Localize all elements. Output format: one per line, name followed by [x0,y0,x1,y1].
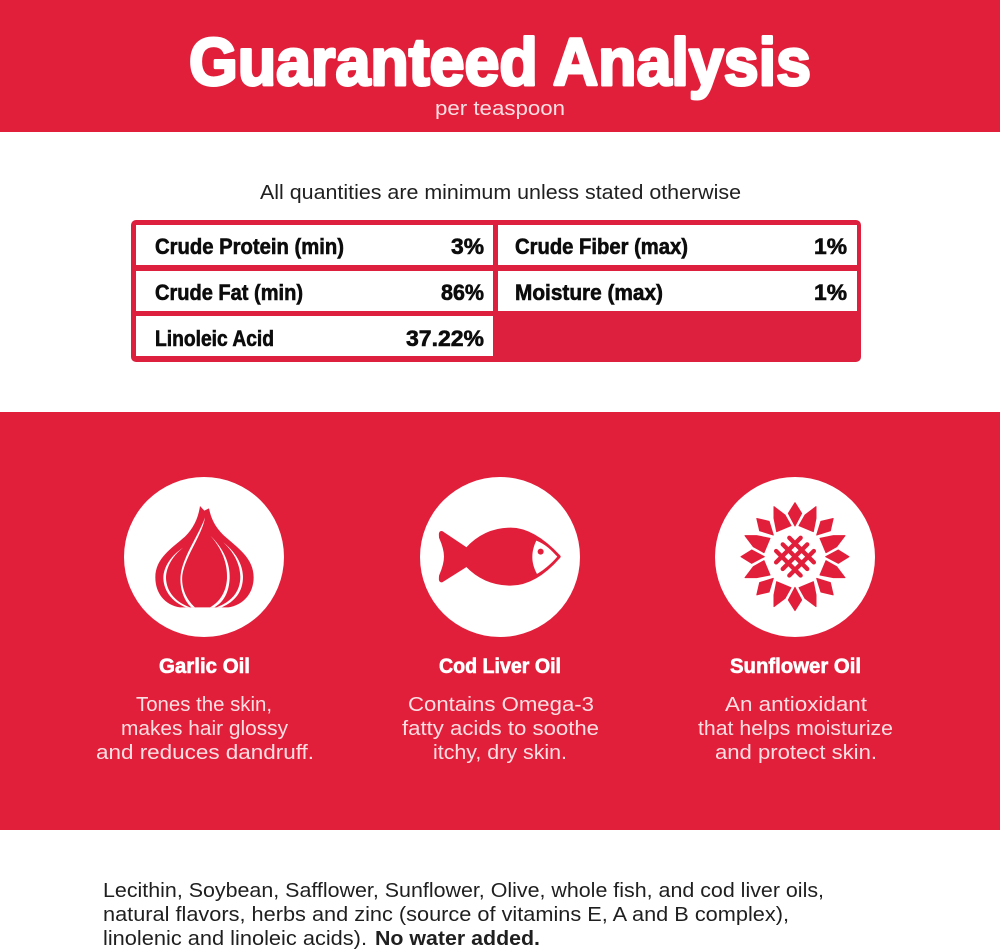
subtitle: per teaspoon [435,98,565,120]
ingredients text: linolenic and linoleic acids). [103,928,367,950]
text: sunflower oil description: that helps moisturize [698,718,893,740]
row: crude fat: 86% [441,280,484,305]
panel: oils [0,412,1000,830]
ingredients text: natural flavors, herbs and zinc (source of vitamins E, A and B complex), [103,904,789,926]
icon: sunflower [715,477,875,637]
text: garlic oil description: Tones the skin, [136,694,272,716]
heading: cod liver oil: Cod Liver Oil [439,655,561,678]
row: crude protein: 3% [451,234,484,259]
text: sunflower oil description: An antioxidant [725,694,867,716]
row: moisture [498,271,857,311]
row: crude fiber: 1% [814,234,847,259]
heading: sunflower oil: Sunflower Oil [730,655,861,678]
row: crude fiber: Crude Fiber (max) [515,234,688,259]
row: moisture: 1% [814,280,847,305]
header band [0,0,1000,132]
text: cod liver oil description [402,694,599,764]
row: crude protein [136,225,493,265]
text: cod liver oil description: itchy, dry skin. [433,742,567,764]
row: moisture: Moisture (max) [515,280,663,305]
icon: fish [420,477,580,637]
title: Guaranteed Analysis [189,25,811,100]
table note: All quantities are minimum unless stated otherwise [260,182,741,204]
callout: no water added: No water added. [375,928,540,950]
ingredients text: Lecithin, Soybean, Safflower, Sunflower, Olive, whole fish, and cod liver oils, [103,880,824,902]
text: garlic oil description: and reduces dandruff. [96,742,314,764]
row: crude fat: Crude Fat (min) [155,280,303,305]
text: garlic oil description: makes hair glossy [121,718,288,740]
heading: garlic oil: Garlic Oil [159,655,250,678]
ingredients text [103,880,824,950]
text: garlic oil description [96,694,314,764]
row: crude fiber [498,225,857,265]
analysis table [131,220,861,362]
text: cod liver oil description: Contains Omega-3 [408,694,594,716]
row: linoleic acid: 37.22% [406,326,484,351]
row: crude protein: Crude Protein (min) [155,234,344,259]
row: linoleic acid: Linoleic Acid [155,326,274,351]
row: linoleic acid [136,316,493,356]
text: sunflower oil description [698,694,893,764]
text: cod liver oil description: fatty acids to soothe [402,718,599,740]
row: crude fat [136,271,493,311]
icon: garlic [124,477,284,637]
text: sunflower oil description: and protect skin. [715,742,877,764]
